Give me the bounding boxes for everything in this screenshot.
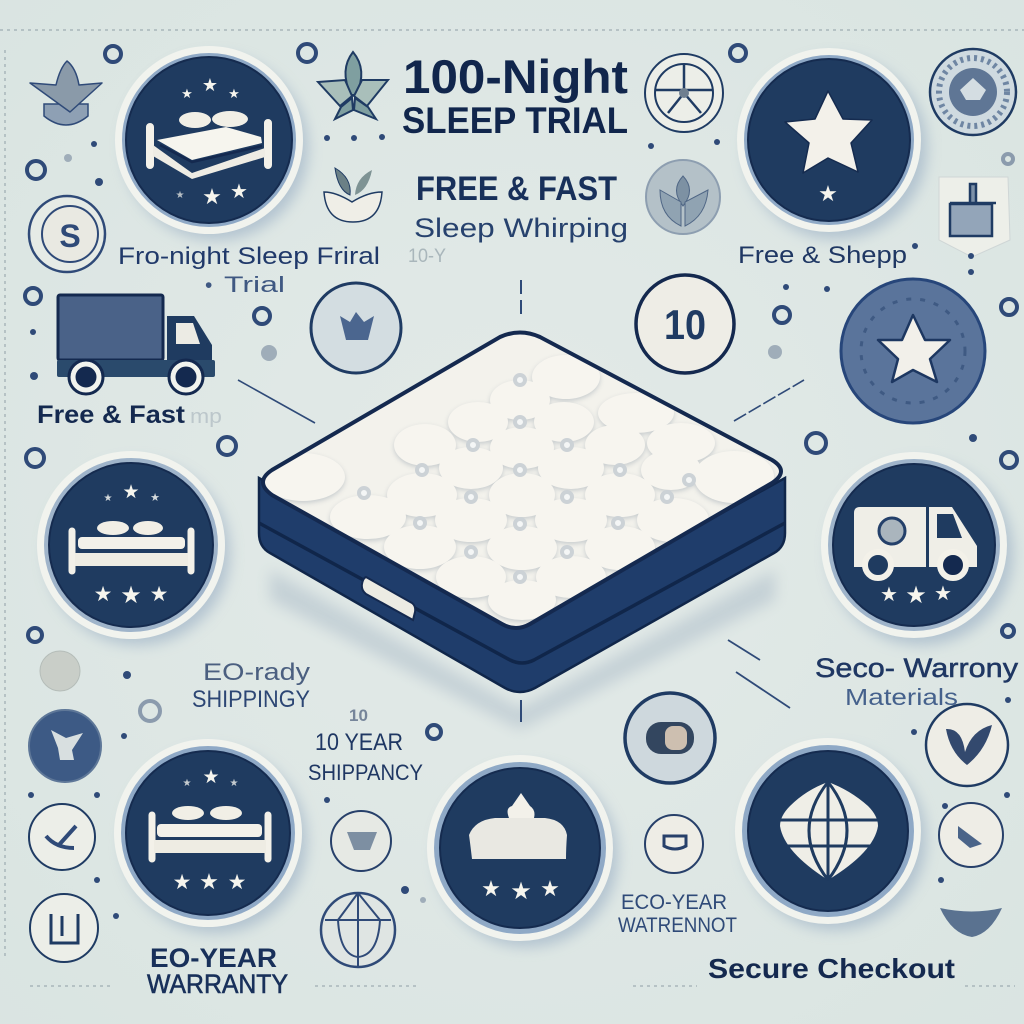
badge: bed bottom left bbox=[114, 739, 307, 933]
badge: star top right: ★ bbox=[818, 181, 838, 206]
badge: truck middle right: ★ bbox=[934, 583, 952, 605]
subtitle: free and fast: FREE & FAST bbox=[416, 170, 617, 208]
badge: bed middle left: ★ bbox=[120, 582, 142, 609]
text: 10 year shipping: SHIPPANCY bbox=[308, 760, 423, 785]
icon: compass star bbox=[645, 54, 723, 132]
text: eco-year watrennot bbox=[618, 891, 737, 937]
text: warranty materials: Materials bbox=[845, 684, 958, 710]
icon: gray leaf circle bbox=[646, 160, 720, 234]
badge: bed top left: ★ bbox=[228, 86, 240, 101]
text: 10 year shipping: 10 YEAR bbox=[315, 729, 403, 756]
text: secure checkout: Secure Checkout bbox=[708, 953, 955, 984]
text: eco-year warranty: WARRANTY bbox=[147, 969, 288, 999]
badge: bed top left: ★ bbox=[202, 75, 218, 95]
subtitle: free and fast bbox=[408, 170, 628, 267]
subtitle: free and fast: Sleep Whirping bbox=[414, 213, 628, 243]
mattress outline bbox=[263, 332, 781, 628]
text: eco-year warranty bbox=[147, 943, 288, 999]
badge: bed top left: ★ bbox=[176, 190, 185, 201]
icon: crown circle bbox=[311, 283, 401, 373]
title: SLEEP TRIAL bbox=[402, 100, 628, 141]
title bbox=[402, 50, 628, 141]
mattress handle bbox=[362, 577, 415, 620]
text: eco-year watrennot: WATRENNOT bbox=[618, 914, 737, 937]
text: free and shepp: Free & Shepp bbox=[738, 242, 907, 269]
badge: star top right bbox=[737, 48, 927, 239]
badge: bed middle left bbox=[37, 451, 230, 645]
badge: bed middle left: ★ bbox=[150, 492, 160, 504]
text: eco-ready shipping bbox=[192, 659, 310, 713]
icon: leaf check circle bbox=[926, 704, 1008, 786]
badge: bed middle left: ★ bbox=[150, 583, 168, 606]
mattress tufts bbox=[261, 355, 774, 622]
icon: navy star circle bbox=[29, 710, 101, 782]
text: warranty materials: Seco- Warrony bbox=[815, 653, 1019, 683]
badge: bed top left: ★ bbox=[230, 181, 248, 203]
icon: dark ring circle bbox=[625, 693, 715, 783]
badge: bed bottom left: ★ bbox=[183, 778, 192, 789]
icon: small leaf circle bbox=[939, 803, 1003, 867]
icon: S coin bbox=[29, 196, 105, 272]
text: night sleep trial: • bbox=[205, 274, 212, 297]
text: eco-ready shipping: SHIPPINGY bbox=[192, 686, 310, 713]
badge: truck middle right bbox=[821, 452, 1013, 645]
decoration bbox=[25, 44, 1017, 739]
badge: pillow bottom centre: ★ bbox=[540, 876, 560, 901]
title: 100-Night bbox=[403, 50, 628, 103]
mattress top bbox=[263, 332, 781, 628]
subtitle: free and fast: 10-Y bbox=[408, 246, 446, 267]
text: eco-ready shipping: EO-rady bbox=[203, 659, 310, 686]
icon: bowl circle bbox=[331, 811, 391, 871]
mattress buttons bbox=[359, 375, 694, 582]
badge: pillow bottom centre: ★ bbox=[510, 878, 532, 905]
icon: seal top right bbox=[930, 49, 1016, 135]
badge: bed top left: ★ bbox=[202, 184, 222, 209]
text: 10 year shipping bbox=[308, 706, 423, 785]
icon: bowl lower right bbox=[940, 908, 1002, 937]
icon: S coin: S bbox=[59, 218, 81, 254]
text: night sleep trial bbox=[118, 243, 380, 297]
badge: pillow bottom centre: ★ bbox=[481, 876, 501, 901]
badge: bed middle left: ★ bbox=[104, 493, 113, 504]
badge: bed middle left: ★ bbox=[122, 482, 140, 503]
badge: truck middle right: ★ bbox=[905, 582, 927, 609]
text: eco-year watrennot: ECO-YEAR bbox=[621, 891, 727, 914]
badge: bed bottom left: ★ bbox=[173, 871, 191, 894]
text: warranty materials bbox=[815, 653, 1019, 710]
icon: number 10: 10 bbox=[664, 301, 706, 348]
mattress bbox=[259, 332, 785, 730]
text: eco-year warranty: EO-YEAR bbox=[150, 943, 277, 973]
text: night sleep trial: Trial bbox=[224, 272, 285, 297]
icon: number 10 bbox=[636, 275, 734, 373]
badge: bed middle left: ★ bbox=[94, 583, 112, 606]
icon: box right bbox=[939, 177, 1010, 257]
text: 10 year shipping: 10 bbox=[349, 706, 368, 725]
medallion: star right bbox=[841, 279, 985, 423]
icon: outlined check circle bbox=[29, 804, 95, 870]
badge: bed top left: ★ bbox=[181, 86, 193, 101]
badge: bed bottom left: ★ bbox=[228, 871, 246, 894]
icon: delivery truck bbox=[57, 295, 215, 394]
badge: bed bottom left: ★ bbox=[230, 778, 239, 789]
icon: target globe bbox=[321, 893, 395, 967]
mattress base bbox=[259, 478, 785, 692]
icon: U circle bbox=[30, 894, 98, 962]
badge: bed bottom left: ★ bbox=[199, 869, 219, 894]
icon: leaf bowl bbox=[324, 168, 382, 222]
icon: leaf star top centre bbox=[318, 52, 388, 119]
badge: pillow bottom centre bbox=[427, 755, 618, 947]
icon: leaf top left bbox=[30, 61, 102, 125]
icon: cup circle bbox=[645, 815, 703, 873]
text: free and fast left: mp bbox=[190, 406, 222, 428]
badge: globe shield bottom right bbox=[735, 738, 926, 930]
icon: pale circle bbox=[40, 651, 80, 691]
badge: bed top left bbox=[115, 46, 308, 240]
text: free and fast left: Free & Fast bbox=[37, 401, 186, 429]
mattress shadow bbox=[270, 570, 775, 730]
text: night sleep trial: Fro-night Sleep Friral bbox=[118, 243, 380, 270]
badge: truck middle right: ★ bbox=[880, 584, 898, 606]
badge: bed bottom left: ★ bbox=[202, 767, 220, 788]
